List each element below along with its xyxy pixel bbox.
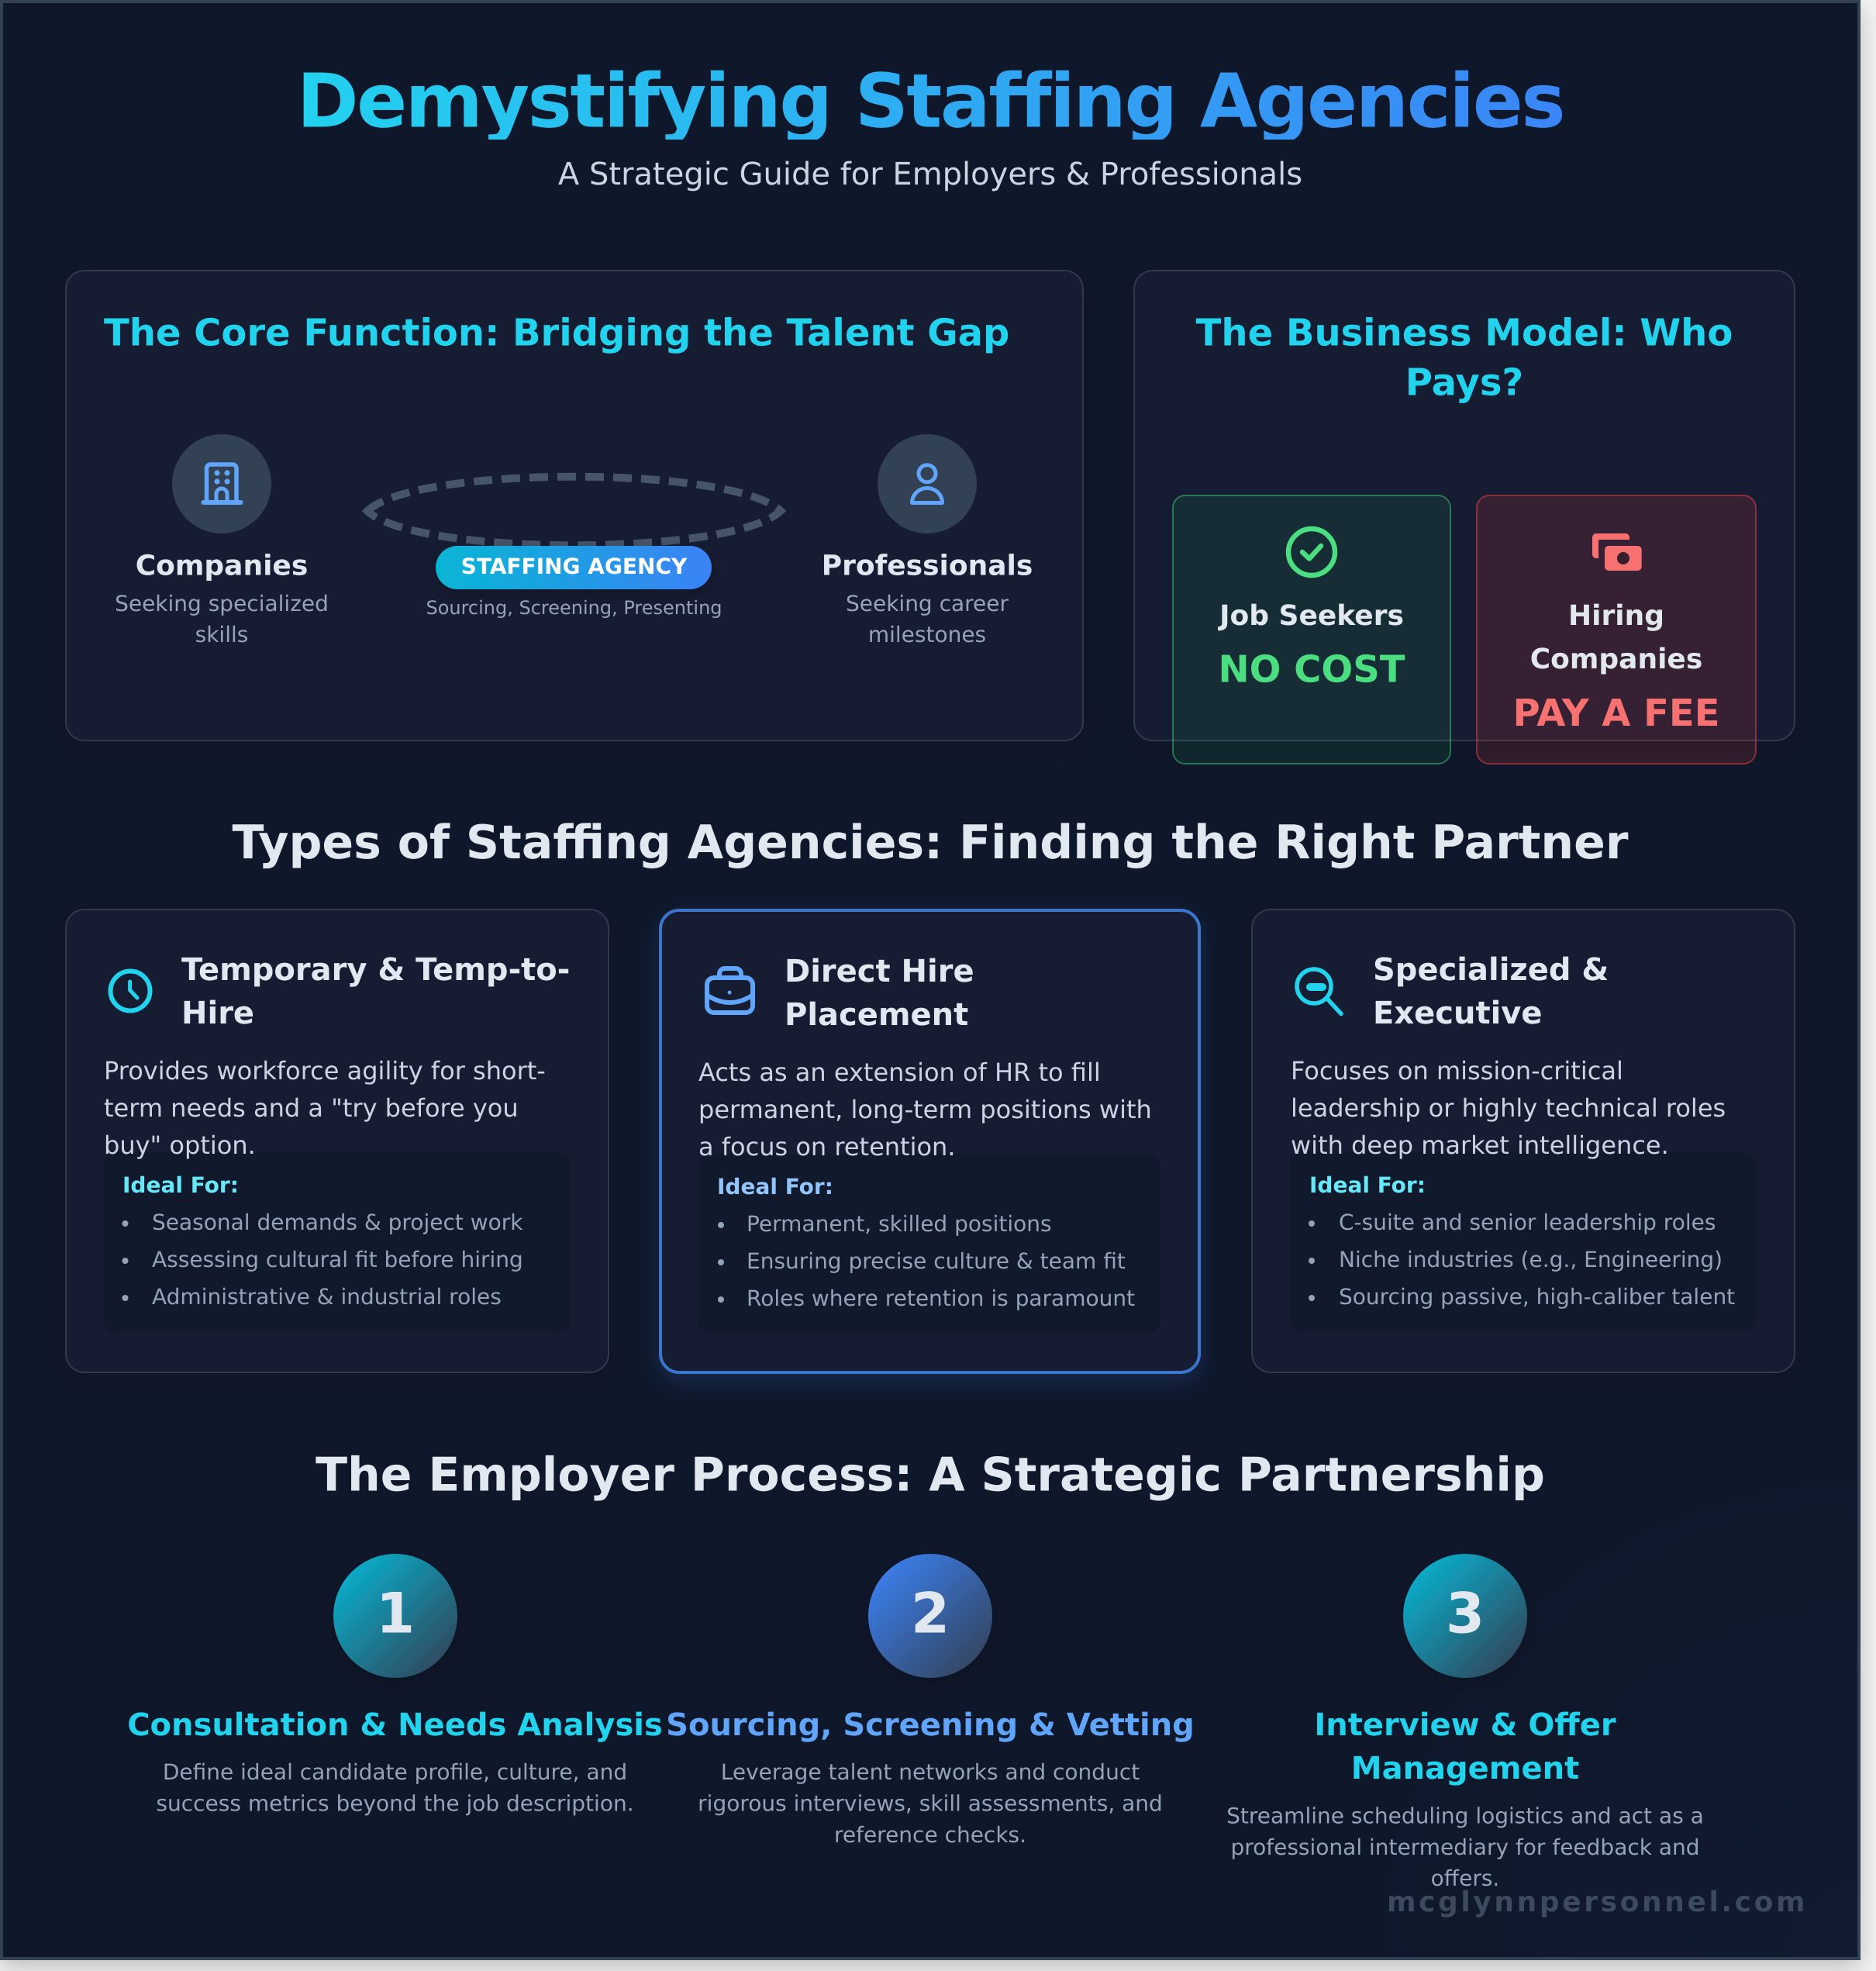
connector: dashed loop	[367, 477, 781, 545]
label: job seekers: Job Seekers	[1217, 600, 1404, 632]
ideal-for box: Roles where retention is paramount	[747, 1286, 1135, 1311]
step title: Interview & Offer	[1314, 1707, 1616, 1743]
card: temporary	[66, 910, 609, 1372]
step description: offers.	[1431, 1866, 1499, 1891]
card: job seekers	[1173, 495, 1450, 764]
ideal-for box	[1290, 1152, 1757, 1332]
step 1: 1	[376, 1580, 415, 1645]
card: hiring companies	[1477, 495, 1756, 764]
description: companies: skills	[195, 622, 248, 647]
icon: search	[1297, 969, 1341, 1014]
card title: Direct Hire	[785, 954, 974, 989]
step 3	[1226, 1554, 1704, 1891]
badge: staffing agency: STAFFING AGENCY	[461, 554, 688, 579]
ideal-for box	[698, 1154, 1160, 1334]
ideal-for box: Ideal For:	[717, 1174, 833, 1200]
ideal-for box: Ideal For:	[122, 1172, 239, 1198]
value: no cost: NO COST	[1218, 648, 1405, 692]
step description: Streamline scheduling logistics and act as a	[1226, 1804, 1704, 1828]
label: hiring companies: Hiring	[1568, 600, 1664, 632]
step 3: 3	[1446, 1580, 1485, 1645]
heading: business model: Pays?	[1405, 361, 1523, 405]
card title: Placement	[785, 997, 968, 1033]
step description: professional intermediary for feedback and	[1230, 1835, 1700, 1860]
node: professionals	[822, 434, 1033, 647]
label: professionals: Professionals	[822, 551, 1033, 582]
icon: briefcase	[707, 968, 753, 1013]
step description: success metrics beyond the job description.	[156, 1791, 634, 1816]
card description: buy" option.	[104, 1130, 256, 1160]
ideal-for box: Ensuring precise culture & team fit	[747, 1248, 1126, 1274]
step 2	[666, 1554, 1195, 1848]
step 1	[127, 1554, 663, 1816]
card description: Provides workforce agility for short-	[104, 1056, 546, 1086]
icon: clock	[110, 971, 150, 1011]
card title: Executive	[1373, 996, 1542, 1031]
card title: Hire	[181, 996, 254, 1031]
ideal-for box: Ideal For:	[1309, 1172, 1426, 1198]
card description: Focuses on mission-critical	[1291, 1056, 1623, 1086]
section heading: process: The Employer Process: A Strategic Partnership	[316, 1448, 1545, 1503]
step description: reference checks.	[834, 1822, 1026, 1848]
ideal-for box: Assessing cultural fit before hiring	[152, 1247, 523, 1272]
description: professionals: milestones	[868, 622, 986, 647]
card description: Acts as an extension of HR to fill	[698, 1058, 1101, 1087]
step description: rigorous interviews, skill assessments, and	[698, 1791, 1163, 1816]
watermark: mcglynnpersonnel.com	[1387, 1886, 1808, 1918]
card description: permanent, long-term positions with	[698, 1095, 1152, 1124]
heading: business model: The Business Model: Who	[1196, 312, 1733, 355]
label: hiring companies: Companies	[1530, 644, 1702, 675]
panel: core function	[66, 271, 1083, 740]
icon: building	[203, 464, 240, 502]
ideal-for box: Niche industries (e.g., Engineering)	[1339, 1247, 1723, 1272]
icon: money	[1592, 533, 1642, 571]
card description: with deep market intelligence.	[1291, 1130, 1669, 1160]
ideal-for box: Sourcing passive, high-caliber talent	[1339, 1284, 1735, 1310]
ideal-for box: Permanent, skilled positions	[747, 1211, 1052, 1237]
step description: Leverage talent networks and conduct	[721, 1759, 1140, 1785]
card title: Specialized &	[1373, 952, 1609, 988]
card description: leadership or highly technical roles	[1291, 1093, 1726, 1123]
step description: Define ideal candidate profile, culture, and	[163, 1759, 627, 1785]
icon: person	[912, 465, 943, 502]
ideal-for box: Seasonal demands & project work	[152, 1210, 523, 1235]
ideal-for box	[104, 1152, 571, 1332]
heading: core function: The Core Function: Bridging the Talent Gap	[104, 312, 1009, 355]
panel: business model	[1134, 271, 1795, 764]
label: companies: Companies	[136, 551, 308, 582]
icon: check circle	[1288, 529, 1335, 575]
step 2: 2	[911, 1580, 950, 1645]
badge: staffing agency	[436, 546, 712, 589]
description: professionals: Seeking career	[846, 591, 1009, 616]
title: Demystifying Staffing Agencies	[297, 57, 1564, 144]
card description: term needs and a "try before you	[104, 1093, 519, 1123]
value: pay a fee: PAY A FEE	[1512, 692, 1720, 735]
section heading: types: Types of Staffing Agencies: Finding the Right Partner	[233, 816, 1629, 870]
step title: Consultation & Needs Analysis	[127, 1707, 663, 1743]
step title: Management	[1351, 1751, 1579, 1786]
card: specialized	[1252, 910, 1795, 1372]
step title: Sourcing, Screening & Vetting	[666, 1707, 1195, 1743]
card description: a focus on retention.	[698, 1132, 955, 1162]
description: companies: Seeking specialized	[115, 591, 329, 616]
card: direct hire (highlighted)	[660, 910, 1199, 1372]
ideal-for box: Administrative & industrial roles	[152, 1284, 502, 1310]
subtitle: A Strategic Guide for Employers & Professionals	[558, 157, 1302, 192]
node: companies	[115, 434, 329, 647]
card title: Temporary & Temp-to-	[181, 952, 570, 988]
ideal-for box: C-suite and senior leadership roles	[1339, 1210, 1716, 1235]
caption: agency actions: Sourcing, Screening, Presenting	[426, 597, 722, 619]
